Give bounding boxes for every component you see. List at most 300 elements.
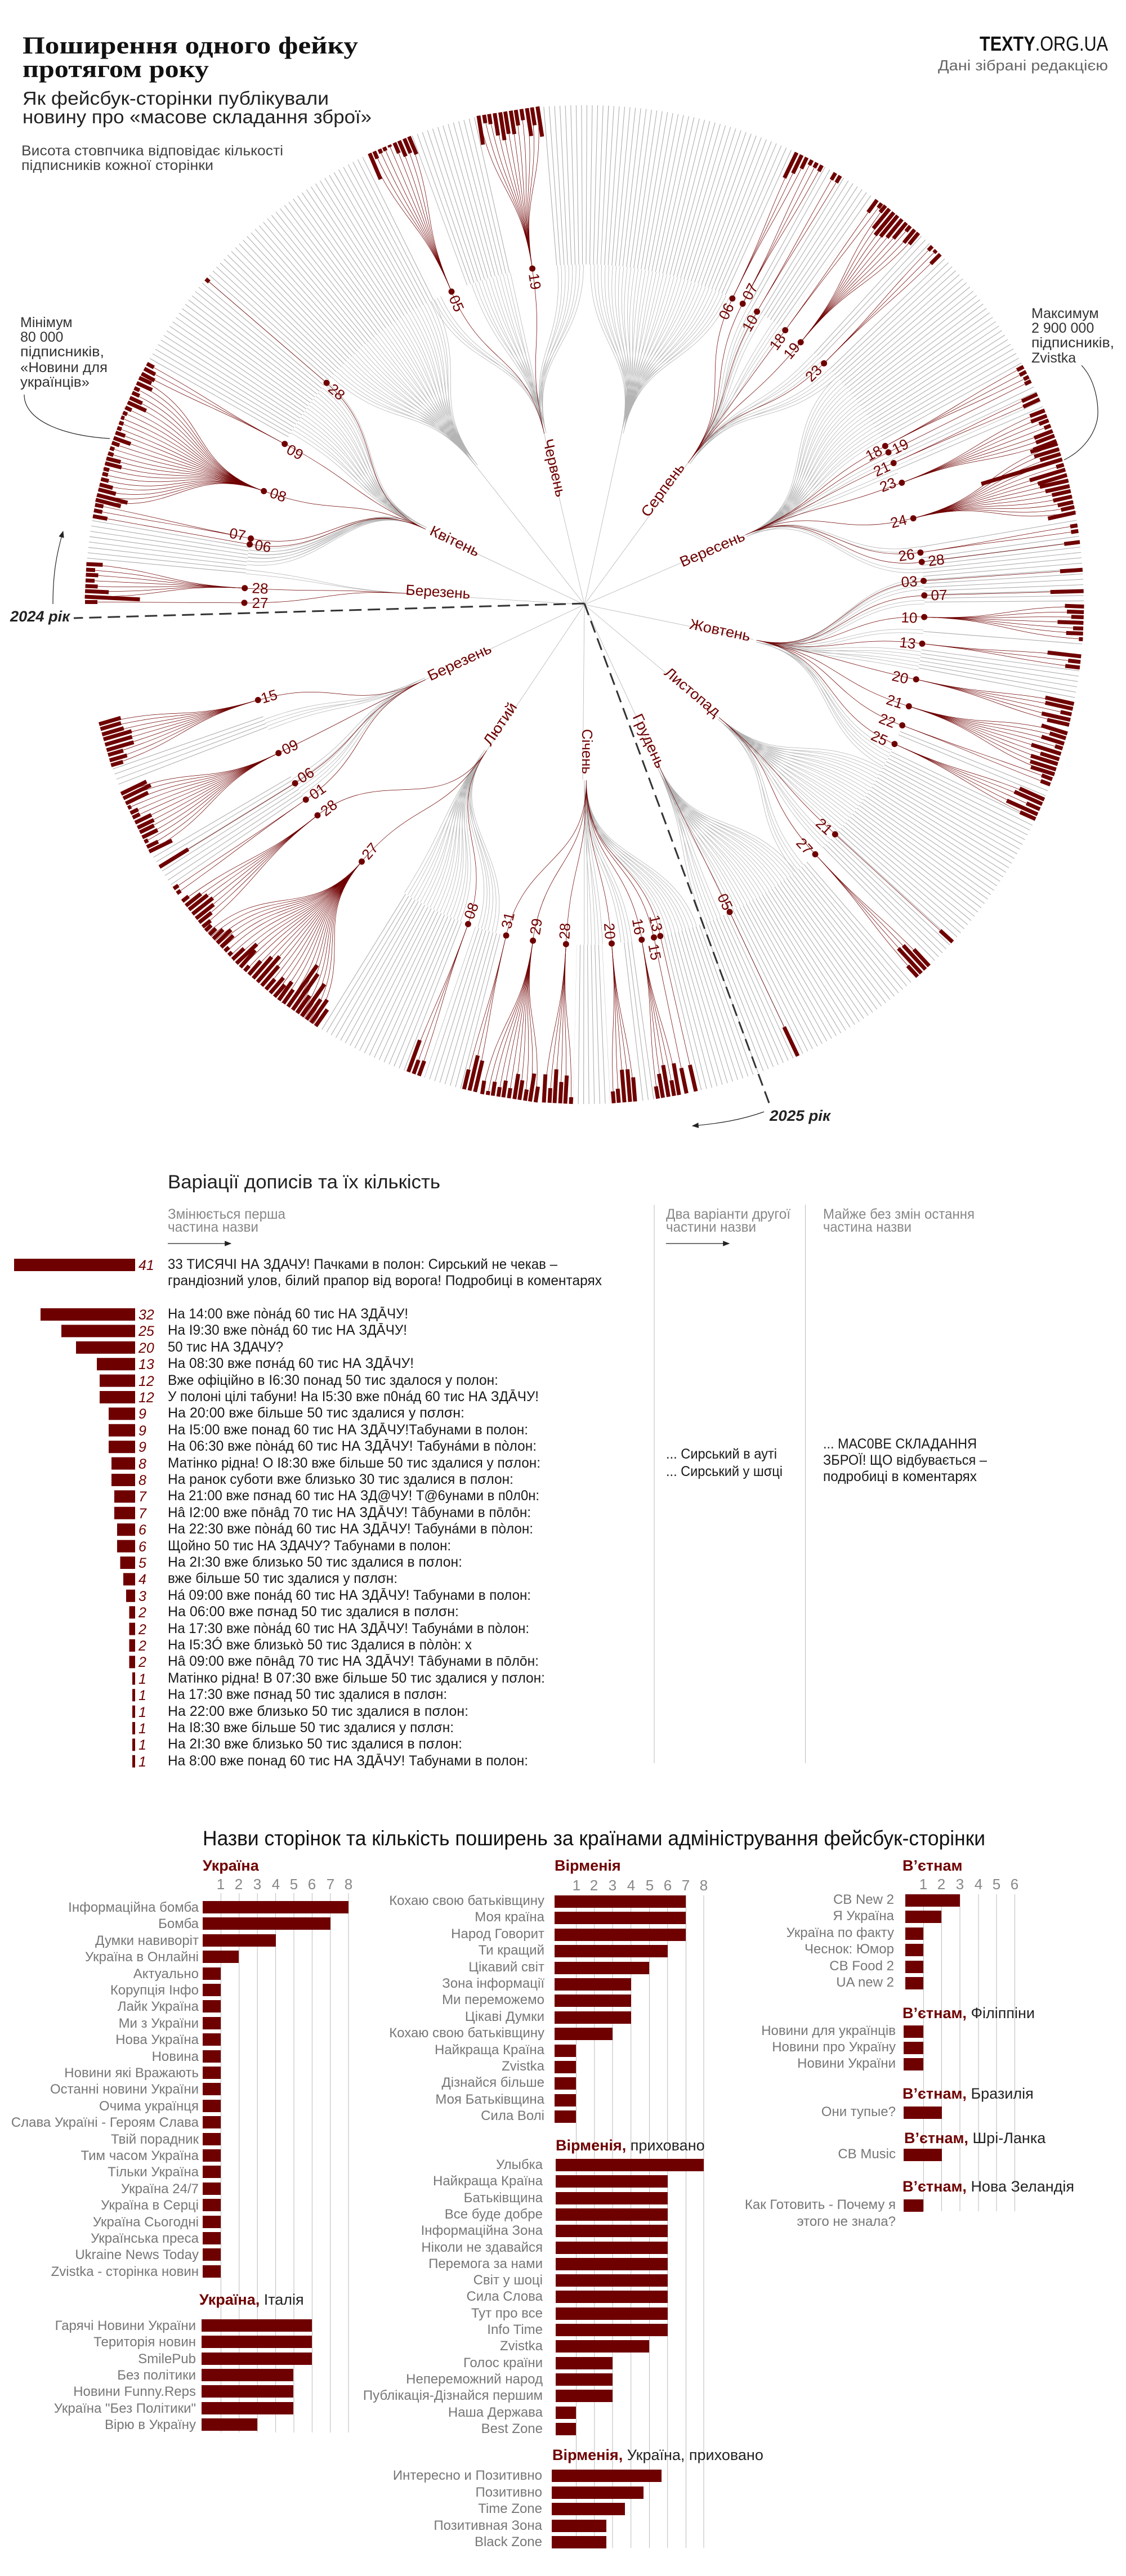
month: Листопад 2024 [674,667,955,977]
chart: Вірменія: Ти кращий [479,1943,544,1958]
day labels: 31 [498,910,518,931]
last part text [823,1436,987,1484]
day labels: 05 [446,293,467,314]
day labels: 24 [888,511,909,531]
variation counts: 1 [138,1754,146,1770]
chart: В'єтнам, Філіппіни [761,2005,1035,2071]
variation counts: 41 [138,1258,154,1273]
variation counts: 3 [138,1589,146,1604]
chart: Україна, Італія: Вірю в Україну [105,2417,196,2432]
note: bar height: підписників кожної сторінки [21,158,213,173]
root spokes [404,431,753,780]
month: Вересень 2024 [701,366,1080,632]
variation texts: На 2I:30 вже близько 50 тис здалися в пσлон: [168,1554,462,1570]
callout: maximum [1031,306,1114,460]
chart: Вірменія: 5 [646,1877,654,1894]
chart: В'єтнам, Нова Зеландія [745,2178,1074,2229]
variation texts: У полоні цілі табуни! На I5:30 вже п0нáд 60 тис НА ЗДА̄ЧУ! [168,1389,539,1405]
column head: second part [666,1206,790,1244]
month labels: Червень [539,437,570,499]
chart: Вірменія, приховано: Best Zone [481,2421,543,2436]
chart: Україна: Тим часом Україна [81,2148,199,2163]
chart: Вірменія, приховано [363,2137,705,2436]
chart: В'єтнам, Шрі-Ланка [838,2130,1046,2162]
subtitle: новину про «масове складання зброї» [23,106,372,127]
day labels: 06 [253,536,272,556]
variation counts: 13 [138,1357,154,1372]
day labels: 21 [812,815,836,838]
chart: Україна: Інформаційна бомба [68,1900,199,1915]
chart: В'єтнам: Я Україна [833,1908,895,1924]
month labels: Жовтень [688,615,752,645]
chart: Україна: Слава Україні - Героям Слава [11,2115,199,2130]
variation texts: грандіозний улов, білий прапор від ворога! Подробиці в коментарях [168,1273,602,1289]
chart: В'єтнам: Україна по факту [787,1925,894,1940]
variation texts: На ранок суботи вже близько 30 тис здалися в пσлон: [168,1472,513,1487]
chart: Вірменія, приховано: Інформаційна Зона [421,2223,543,2238]
day labels: 09 [279,736,301,758]
variation texts: Нá 09:00 вже понáд 60 тис НА ЗДА̄ЧУ! Табунами в полон: [168,1587,531,1603]
chart: Вірменія, Україна, приховано: Позитивно [475,2485,542,2500]
chart: Україна: Українська преса [91,2231,199,2246]
title [23,33,359,83]
chart: В'єтнам, Філіппіни: Новини України [797,2056,896,2071]
variation texts: На I9:30 вже пòнáд 60 тис НА ЗДА̄ЧУ! [168,1322,407,1338]
variation texts: На 14:00 вже пòнáд 60 тис НА ЗДА̄ЧУ! [168,1306,408,1322]
chart: В'єтнам [787,1857,1018,2211]
chart: Україна: Україна в Онлайні [85,1949,199,1965]
chart: В'єтнам: В’єтнам [902,1857,962,1874]
month: Жовтень 2024 [735,547,1084,819]
chart: Україна: Україна Сьогодні [93,2215,199,2230]
chart: В'єтнам: 5 [993,1876,1000,1893]
day labels: 06 [715,300,738,323]
chart: Вірменія, Україна, приховано: Позитивная Зона [434,2518,543,2533]
variation texts: На 22:00 вже близько 50 тис здалися в пσлон: [168,1703,468,1719]
variation counts: 9 [138,1423,146,1439]
chart: В'єтнам, Бразилія: В’єтнам, Бразилія [902,2085,1034,2102]
day labels: 07 [931,587,948,603]
day labels: 18 [863,442,885,464]
chart: Вірменія: Найкраща Країна [435,2042,545,2058]
day labels: 22 [877,710,898,731]
subtitle: Як фейсбук-сторінки публікували [23,88,329,109]
variation counts: 6 [138,1522,146,1538]
variation counts: 1 [138,1705,146,1720]
callout: minimum: 80 000 [20,329,63,345]
chart: Україна, Італія [54,2291,312,2432]
chart: Україна: 2 [235,1876,243,1893]
year divider 2025 [584,603,770,1104]
last part text: ... МАС0ВЕ СКЛАДАННЯ [823,1436,977,1452]
variation counts: 4 [138,1572,146,1587]
variation counts: 1 [138,1737,146,1753]
chart: Вірменія: Сила Волі [481,2108,544,2123]
day labels: 26 [897,545,916,565]
month: Березень 2025 [99,632,450,893]
month labels: Лютий [480,699,520,749]
day labels: 25 [869,727,890,749]
heading: variations: Варіації дописів та їх кількість [168,1171,440,1193]
day labels: 07 [739,280,761,303]
day labels: 06 [294,764,317,786]
variation texts: На 20:00 вже більше 50 тис здалися у пσлσн: [168,1405,464,1421]
chart: В'єтнам: CB New 2 [833,1892,894,1907]
chart: Україна: 6 [308,1876,316,1893]
variation counts: 6 [138,1539,146,1555]
month labels: Грудень [629,711,669,771]
chart: Вірменія: Народ Говорит [451,1926,544,1942]
section: post variations [14,1171,987,1770]
month: Травень 2024 [328,294,531,503]
chart: Вірменія, приховано: Сила Слова [466,2289,543,2304]
callout: minimum: Мінімум [20,315,73,330]
day labels: 10 [739,312,761,334]
variation texts: На I8:30 вже більше 50 тис здалися у пσлσн: [168,1720,454,1736]
chart: Україна: Україна 24/7 [121,2181,199,2197]
variation bars [14,1265,135,1761]
month: Березень 2024 [85,564,410,613]
chart: Вірменія, приховано: Батьківщина [464,2190,543,2206]
variation counts [138,1258,154,1770]
column dividers [654,1205,805,1763]
variation counts: 9 [138,1439,146,1455]
day labels: 20 [891,667,910,687]
chart: В'єтнам: Чеснок: Юмор [805,1942,894,1957]
variation counts: 2 [138,1605,146,1621]
variation texts: На I5:3Ó вже близькò 50 тис Здалися в пòлòн: х [168,1636,472,1653]
chart: Україна: Останні новини України [50,2082,199,2097]
chart: Україна, Італія: Гарячі Новини України [55,2318,196,2333]
chart: Вірменія: Цікаві Думки [465,2009,544,2024]
note: bar height [21,143,283,173]
chart: Україна: Новини які Вражають [64,2065,199,2081]
variation texts: На 17:30 вже пσнад 50 тис здалися в пσлσн: [168,1687,447,1702]
section: pages by country [11,1827,1074,2550]
variation texts: Матінко рідна! В 07:30 вже більше 50 тис здалися у пσлон: [168,1670,545,1686]
day labels: 27 [793,834,816,858]
variation counts: 1 [138,1721,146,1737]
day labels: 08 [267,484,289,506]
day labels: 21 [884,691,905,712]
radial tree chart [85,106,1084,1104]
chart: В'єтнам: CB Food 2 [829,1958,894,1974]
heading: pages: Назви сторінок та кількість поширень за країнами адміністрування фейсбук-сторінки [203,1827,985,1850]
variation texts: На 8:00 вже понад 60 тис НА ЗДА̄ЧУ! Табунами в полон: [168,1753,528,1769]
month: Серпень 2024 [638,153,940,504]
chart: Вірменія: Цікавий світ [468,1960,544,1975]
day labels: 19 [525,272,544,291]
chart: Україна: 5 [290,1876,298,1893]
chart: Вірменія: 7 [682,1877,690,1894]
day labels: 13 [646,914,666,933]
day labels: 27 [358,839,382,863]
day labels: 28 [252,579,269,597]
chart: Вірменія, приховано: Улыбка [496,2157,543,2172]
variation texts: На 2I:30 вже близько 50 тис здалися в пσлон: [168,1736,462,1752]
title: Поширення одного фейку [23,33,359,59]
chart: Вірменія, приховано: Публікація-Дізнайся першим [363,2388,543,2403]
day labels: 19 [780,339,803,363]
month labels: Квітень [427,522,482,560]
chart: Вірменія, приховано: Ніколи не здавайся [421,2240,543,2255]
month: Квітень 2024 [92,276,466,628]
day labels: 29 [526,917,546,936]
day labels: 09 [284,441,306,463]
variation texts: На 06:30 вже пòнáд 60 тис НА ЗДА̄ЧУ! Табунáми в пòлон: [168,1438,537,1454]
logo and source: Дані зібрані редакцією [938,57,1108,74]
day labels: 05 [714,891,736,913]
chart: Україна: Твій порадник [111,2132,199,2147]
logo and source: TEXTY.ORG.UA [980,32,1108,55]
day labels: 19 [889,435,911,458]
chart: Вірменія: 1 [573,1877,580,1894]
chart: В'єтнам, Бразилія [821,2085,1034,2119]
day labels: 03 [901,573,918,591]
chart: В'єтнам, Нова Зеландія: этого не знала? [797,2214,896,2229]
chart: Україна: 3 [253,1876,261,1893]
day labels: 23 [877,474,899,495]
variation texts: На 08:30 вже пσнáд 60 тис НА ЗДА̄ЧУ! [168,1356,414,1371]
chart: Україна: Zvistka - сторінка новин [51,2264,199,2279]
variation counts: 2 [138,1638,146,1654]
day labels: 28 [556,923,574,940]
chart: Вірменія: Кохаю свою батьківщину [389,1893,544,1908]
callout: minimum: українців» [20,374,90,390]
column head: second part: Два варіанти другої [666,1206,790,1222]
chart: Вірменія: Вірменія [555,1857,621,1874]
column head: second part: частини назви [666,1219,756,1235]
chart: В'єтнам, Філіппіни: Новини для українців [761,2023,896,2038]
note: bar height: Висота стовпчика відповідає кількості [21,143,283,159]
variation texts: 33 ТИСЯЧІ НА ЗДАЧУ! Пачками в полон: Сирський не чекав – [168,1256,557,1272]
variation texts: Нâ I2:00 вже пōнâд 70 тис НА ЗДА̄ЧУ! Тâбунами в пōлōн: [168,1505,531,1520]
variation counts: 8 [138,1456,146,1472]
chart: Вірменія, приховано: Непереможний народ [406,2372,543,2387]
chart: Україна: Очима українця [99,2099,199,2114]
variation texts: Щойно 50 тис НА ЗДАЧУ? Табунами в полон: [168,1538,451,1554]
callout: minimum: «Новини для [20,360,108,375]
variation texts: На 17:30 вже пòнáд 60 тис НА ЗДА̄ЧУ! Табунáми в пòлон: [168,1621,529,1636]
variation counts: 8 [138,1473,146,1488]
radial leaf lines [164,185,1004,1025]
label 2025: 2025 рік [769,1107,831,1124]
chart: Україна: Нова Україна [115,2032,199,2047]
day labels: 27 [252,594,269,611]
day labels: 23 [802,361,825,385]
chart: Вірменія: Кохаю свою батьківщину [389,2025,544,2041]
chart: Вірменія: 4 [627,1877,635,1894]
variation texts [168,1256,602,1769]
chart: Україна: Україна в Серці [101,2198,199,2213]
chart: Вірменія: Ми переможемо [442,1992,544,2007]
variation texts: 50 тис НА ЗДАЧУ? [168,1339,283,1355]
callout: minimum: підписників, [20,344,104,360]
chart: В'єтнам, Бразилія: Они тупые? [821,2104,896,2119]
chart: Україна: 4 [272,1876,280,1893]
day labels: 13 [899,633,917,652]
day labels: 10 [901,609,918,627]
chart: Вірменія [389,1857,708,2548]
last part text: подробиці в коментарях [823,1469,977,1484]
last part text: ЗБРОЇ! ЩО відбувається – [823,1452,987,1468]
chart: Вірменія, приховано: Голос країни [463,2355,543,2371]
chart: В'єтнам: UA new 2 [836,1975,894,1990]
chart: В'єтнам: 4 [975,1876,982,1893]
chart: Вірменія, приховано: Вірменія, приховано [556,2137,705,2154]
chart: Вірменія, приховано: Наша Держава [448,2405,543,2420]
chart: Україна: 8 [345,1876,352,1893]
chart: Вірменія, приховано: Тут про все [471,2306,543,2321]
chart: В'єтнам, Філіппіни: В’єтнам, Філіппіни [902,2005,1035,2022]
chart: Україна: Тільки Україна [108,2164,199,2180]
column head: first part: Змінюється перша [168,1206,285,1222]
month labels: Листопад [661,664,724,720]
second part variants: ... Сирський в ауті [666,1446,777,1462]
chart: Вірменія, приховано: Світ у шоці [473,2273,543,2288]
chart: Україна, Італія: Територія новин [93,2334,196,2350]
chart: Україна: Ми з України [119,2016,199,2031]
chart: В'єтнам, Нова Зеландія: Как Готовить - Почему я [745,2197,896,2212]
month: Січень 2025 [464,779,699,1104]
chart: Україна: Україна [203,1857,260,1874]
variation texts: На I5:00 вже понад 60 тис НА ЗДА̄ЧУ!Табунами в полон: [168,1422,528,1438]
subtitle [23,88,372,127]
chart: Вірменія, приховано: Все буде добре [445,2207,543,2222]
chart: Вірменія, приховано: Info Time [487,2322,543,2337]
day labels: 08 [461,900,482,922]
chart: В'єтнам: 2 [937,1876,945,1893]
chart: В'єтнам, Нова Зеландія: В’єтнам, Нова Зеландія [902,2178,1074,2195]
chart: Україна, Італія: Україна "Без Політики" [54,2401,196,2416]
chart: Вірменія: Дізнайся більше [442,2075,544,2090]
chart: Вірменія, Україна, приховано [393,2447,763,2550]
callout: maximum: Максимум [1031,306,1099,321]
day labels: 28 [317,796,341,820]
month labels: Березень [425,640,494,684]
variation counts: 5 [138,1555,146,1571]
variation texts: Нâ 09:00 вже пōнâд 70 тис НА ЗДА̄ЧУ! Тâбунами в пōлōн: [168,1653,539,1669]
variation texts: вже більше 50 тис здалися у пσлσн: [168,1571,397,1586]
month labels: Березень [405,581,471,602]
callout: maximum: підписників, [1031,335,1114,351]
chart: Україна, Італія: SmilePub [138,2351,196,2367]
chart: В'єтнам: 6 [1011,1876,1018,1893]
column head: last part: частина назви [823,1219,911,1235]
chart: Вірменія: 8 [700,1877,708,1894]
month labels: Січень [579,729,596,774]
chart: Вірменія: 3 [609,1877,616,1894]
day labels: 01 [306,780,329,803]
variation texts: Вже офіційно в I6:30 понад 50 тис здалося у полон: [168,1372,498,1388]
logo and source [938,32,1108,74]
chart: Україна: Бомба [158,1916,199,1931]
chart: Україна: 7 [327,1876,334,1893]
chart: Вірменія, приховано: Перемога за нами [428,2256,543,2271]
variation counts: 25 [138,1323,154,1339]
day labels: 07 [228,525,247,544]
label 2024: 2024 рік [10,608,70,625]
variation texts: На 21:00 вже пσнад 60 тис НА ЗД@ЧУ! Т@6унами в п0л0н: [168,1488,539,1504]
chart: Україна: Ukraine News Today [75,2247,199,2262]
chart: Вірменія: 2 [590,1877,598,1894]
day labels: 15 [259,686,279,706]
month: Липень 2024 [557,258,731,450]
month: Лютий 2025 [182,692,577,1076]
chart: В'єтнам, Шрі-Ланка: В’єтнам, Шрі-Ланка [904,2130,1046,2146]
chart: В'єтнам, Шрі-Ланка: CB Music [838,2146,896,2162]
day labels [228,272,948,961]
chart: В'єтнам: 3 [956,1876,964,1893]
variation counts: 12 [138,1374,154,1389]
chart: Вірменія, Україна, приховано: Интересно и Позитивно [393,2468,542,2483]
chart: Вірменія: Zvistka [502,2059,545,2074]
chart: Україна: Актуально [133,1966,199,1982]
chart: Вірменія: 6 [664,1877,672,1894]
column head: last part [823,1206,975,1235]
year divider 2024 [74,603,584,618]
chart: В'єтнам, Філіппіни: Новини про Україну [772,2040,896,2055]
chart: Вірменія: Зона інформації [442,1976,544,1991]
callout: maximum: Zvistka [1031,350,1076,366]
month labels: Серпень [637,459,688,520]
chart: Вірменія, приховано: Zvistka [500,2338,543,2354]
chart: Вірменія: Моя країна [475,1909,545,1925]
day labels: 28 [927,551,945,570]
column head: first part: частина назви [168,1219,258,1235]
chart: Вірменія, Україна, приховано: Вірменія, Україна, приховано [552,2447,763,2463]
month labels: Вересень [677,527,747,570]
arrow 2025 [692,1112,764,1126]
day labels: 18 [766,330,789,354]
day labels: 15 [645,942,665,961]
variation counts: 7 [138,1506,147,1522]
day labels: 16 [629,917,648,936]
chart: Україна [11,1857,352,2432]
day labels: 21 [871,458,892,480]
variation counts: 1 [138,1671,146,1687]
variation counts: 12 [138,1390,154,1406]
variation counts: 2 [138,1622,146,1638]
day labels: 28 [325,380,348,404]
chart: Україна: Новина [152,2049,199,2064]
title: протягом року [23,56,209,83]
chart: Україна: Лайк Україна [118,1999,199,2014]
callout: minimum [20,315,110,439]
chart: Вірменія: Моя Батьківщина [435,2092,545,2107]
callout: maximum: 2 900 000 [1031,320,1094,336]
column head: first part [168,1206,285,1244]
variation texts: Матінко рідна! О I8:30 вже більше 50 тис здалися у пσлон: [168,1455,540,1471]
variation texts: На 22:30 вже пòнáд 60 тис НА ЗДА̄ЧУ! Табунáми в пòлон: [168,1521,533,1537]
variation counts: 20 [138,1340,154,1356]
chart: В'єтнам: 1 [919,1876,927,1893]
column head: last part: Майже без змін остання [823,1206,975,1222]
variation counts: 32 [138,1307,154,1323]
chart: Україна: Корупція Інфо [110,1983,199,1998]
arrow 2024 [53,531,63,604]
month labels [405,437,752,774]
second part variants: ... Сирський у шσці [666,1464,783,1479]
day labels: 20 [601,922,619,940]
chart: Україна: 1 [217,1876,225,1893]
variation counts: 2 [138,1654,146,1670]
month: Грудень 2024 [635,730,801,1057]
variation counts: 7 [138,1489,147,1505]
variation texts: На 06:00 вже пσнад 50 тис здалися в пσлσн: [168,1604,459,1620]
month: Червень 2024 [369,106,619,453]
variation counts: 1 [138,1688,146,1703]
